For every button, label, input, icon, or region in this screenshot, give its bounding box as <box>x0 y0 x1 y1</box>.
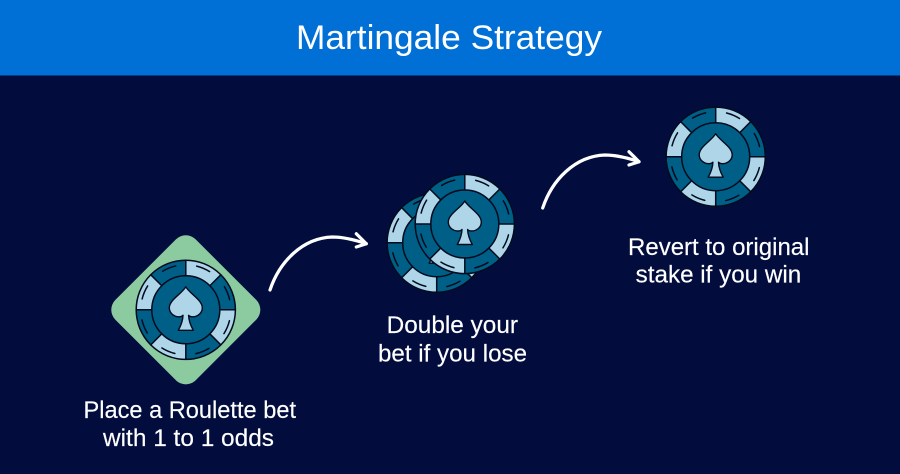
step 1 label: with 1 to 1 odds <box>102 425 274 452</box>
step 3 label: Revert to original <box>628 234 810 261</box>
front chip <box>415 174 515 274</box>
step 1 label: Place a Roulette bet <box>84 397 296 424</box>
step 1 label <box>84 397 296 452</box>
title: Martingale Strategy <box>296 19 602 57</box>
step 2 icon: two stacked chips <box>387 174 515 293</box>
step 2 label <box>378 312 527 368</box>
step 3 label <box>628 234 810 288</box>
arrow: step 1 to step 2 <box>270 234 366 290</box>
step 3 icon: single chip <box>666 107 766 207</box>
back chip <box>387 193 487 293</box>
step 2 label: Double your <box>387 312 518 339</box>
step 3 label: stake if you win <box>636 262 801 288</box>
header banner <box>0 0 900 76</box>
arrow: step 2 to step 3 <box>543 152 639 208</box>
step 2 label: bet if you lose <box>378 340 527 368</box>
step 1 icon: chip on green diamond <box>105 229 266 390</box>
